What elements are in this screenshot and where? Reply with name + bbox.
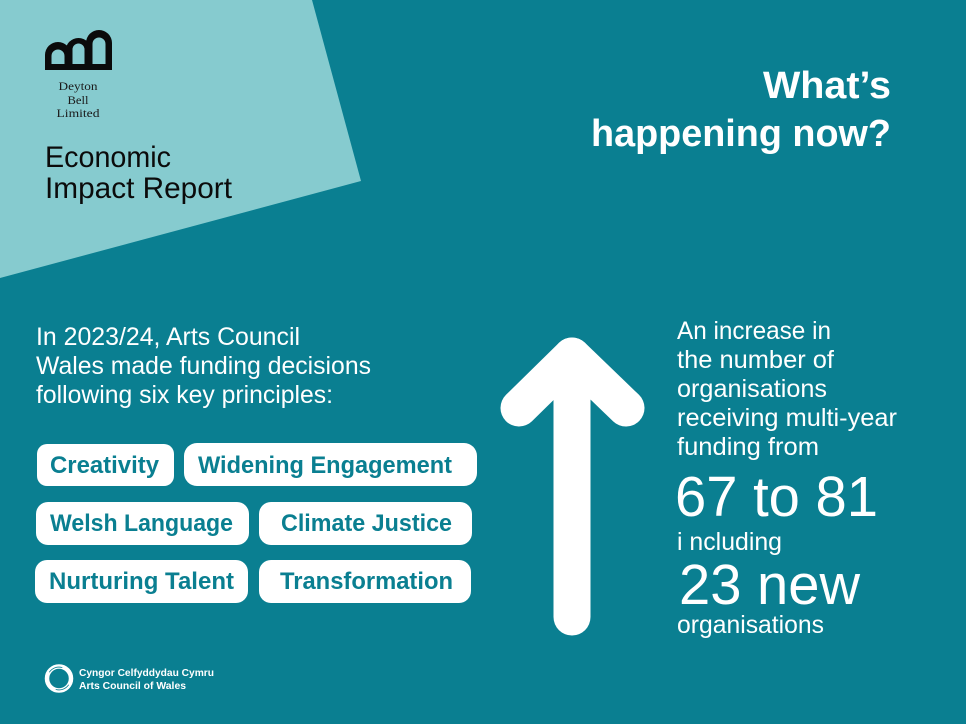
pill: Welsh Language: Welsh Language: [50, 510, 233, 537]
number: 23 new: 23 new: [679, 553, 861, 617]
report title: [45, 141, 233, 205]
pill: Nurturing Talent: [35, 560, 248, 603]
text: including: i ncluding: [677, 528, 782, 556]
pill: Welsh Language: [36, 502, 249, 545]
pill: Transformation: Transformation: [280, 568, 453, 595]
text: organisation name: [79, 667, 214, 692]
text: increase description: organisations: [677, 375, 827, 403]
logo: Arts Council of Wales: [47, 666, 214, 692]
pill: Creativity: Creativity: [50, 452, 160, 479]
report title: Economic: [45, 141, 171, 174]
text: increase description: An increase in: [677, 317, 831, 345]
intro text: In 2023/24, Arts Council: [36, 323, 300, 351]
heading: [591, 65, 891, 155]
heading: happening now?: [591, 113, 891, 155]
pill: Climate Justice: [259, 502, 472, 545]
panel: header shape: [0, 0, 361, 278]
pill: Transformation: [259, 560, 471, 603]
heading: What’s: [763, 65, 891, 107]
text: increase description: funding from: [677, 433, 819, 461]
logo: Deyton Bell Limited: [45, 30, 112, 120]
pill: Creativity: [37, 444, 174, 486]
text: organisations: organisations: [677, 611, 824, 639]
logo text: [56, 79, 100, 120]
logo text: Bell: [68, 93, 89, 107]
pill: Widening Engagement: Widening Engagement: [198, 452, 452, 479]
funding statistic text: [675, 317, 897, 639]
intro text: Wales made funding decisions: [36, 352, 371, 380]
text: organisation name: Arts Council of Wales: [79, 680, 186, 692]
icon: ring: [47, 666, 71, 690]
principles pills: [35, 443, 477, 603]
logo text: Limited: [56, 106, 100, 120]
intro text: [36, 323, 371, 409]
text: increase description: receiving multi-year: [677, 404, 897, 432]
text: organisation name: Cyngor Celfyddydau Cymru: [79, 667, 214, 679]
text: increase description: the number of: [677, 346, 834, 374]
pill: Climate Justice: Climate Justice: [281, 510, 452, 537]
text: increase description: [677, 317, 897, 461]
pill: Nurturing Talent: Nurturing Talent: [49, 568, 234, 595]
number: 67 to 81: 67 to 81: [675, 465, 878, 529]
report title: Impact Report: [45, 172, 233, 205]
intro text: following six key principles:: [36, 381, 333, 409]
pill: Widening Engagement: [184, 443, 477, 486]
icon: up arrow: [519, 356, 626, 617]
icon: arches: [45, 30, 112, 70]
logo text: Deyton: [58, 79, 98, 93]
